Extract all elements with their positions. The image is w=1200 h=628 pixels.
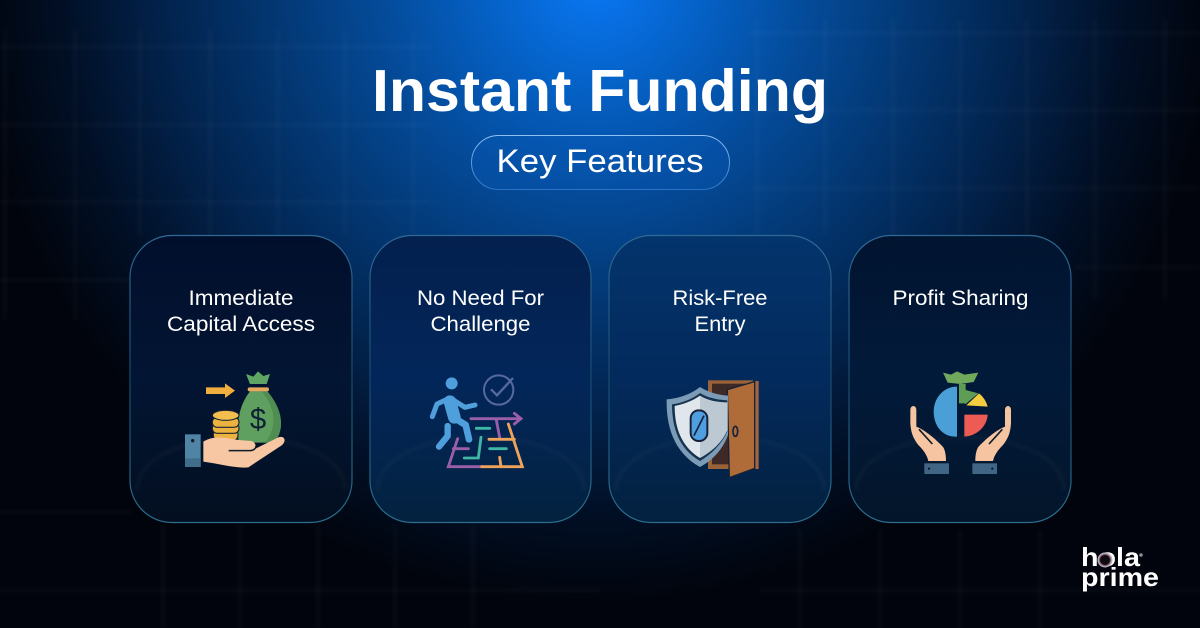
card heading: profit sharing: Profit Sharing bbox=[892, 286, 1028, 310]
card heading: risk-free entry: Entry bbox=[694, 312, 746, 336]
pill: key features bbox=[472, 136, 730, 190]
panel: profit sharing bbox=[849, 236, 1071, 522]
card heading: no need for challenge: Challenge bbox=[430, 312, 530, 336]
icon: hands holding pie chart bbox=[910, 371, 1011, 474]
icon: shield and open door bbox=[667, 380, 759, 478]
icon: money bag on hand bbox=[185, 371, 285, 468]
icon: money bag on hand: $ bbox=[250, 403, 266, 436]
panel: risk-free entry bbox=[609, 236, 831, 522]
panel: no need for challenge bbox=[370, 236, 591, 522]
card heading: immediate capital access: Immediate bbox=[188, 286, 294, 310]
card heading: no need for challenge: No Need For bbox=[417, 286, 544, 310]
icon: person walking through maze bbox=[432, 375, 522, 467]
pill: key features: Key Features bbox=[496, 143, 704, 179]
card heading: risk-free entry: Risk-Free bbox=[672, 286, 768, 310]
logo: hola prime: hola bbox=[1081, 542, 1141, 572]
logo: hola prime bbox=[1081, 542, 1159, 592]
title: Instant Funding bbox=[372, 58, 828, 124]
logo: hola prime: prime bbox=[1081, 562, 1159, 592]
panel: immediate capital access bbox=[130, 236, 352, 522]
card heading: immediate capital access: Capital Access bbox=[167, 312, 315, 336]
